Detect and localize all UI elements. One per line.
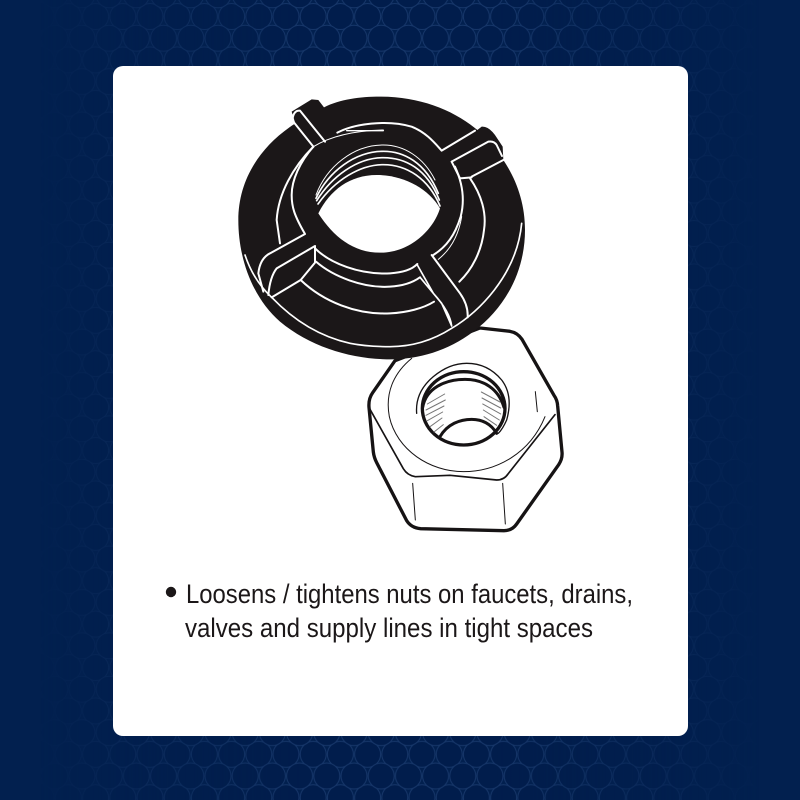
panel: white card [113,66,688,736]
hole [318,175,440,253]
lower right rib [417,265,452,326]
text: feature description: Loosens / tightens nuts on faucets, drains, [186,579,633,609]
threads [316,145,435,195]
hex nut side edges [413,483,505,524]
hex nut washer circle [388,358,545,472]
background: navy honeycomb pattern [117,0,684,800]
hex nut top face edge [370,409,555,480]
icon: hex nut [369,328,562,531]
right rib [452,141,502,162]
white detail lines [245,111,522,347]
text: feature description [185,579,633,643]
text: feature description: valves and supply lines in tight spaces [185,613,593,643]
top left rib [293,111,325,147]
icon: threaded ring nut [238,97,525,359]
hex nut bore [417,363,509,445]
collar [313,130,383,147]
bullet dot [166,587,176,597]
ring body [238,97,525,359]
right inner walls [433,167,463,255]
hex nut outline [369,328,562,531]
rim [245,223,522,347]
lower left rib [268,246,315,297]
lower steps [315,248,417,273]
inner wall [258,147,313,292]
